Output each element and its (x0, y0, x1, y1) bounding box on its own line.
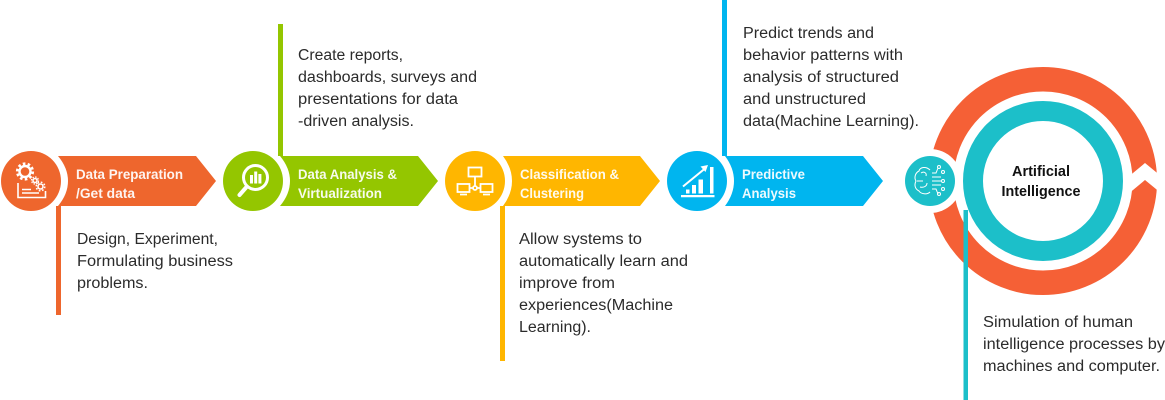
text: classification description: Learning). (519, 319, 591, 336)
step 2: data analysis (223, 24, 477, 211)
accent line: step 1 (56, 206, 61, 315)
arrow: classification (503, 156, 660, 206)
text: data preparation description: problems. (77, 275, 148, 292)
accent line: AI (964, 210, 968, 400)
accent line: step 2 (278, 24, 283, 156)
text: data analysis description: presentations for data (298, 91, 458, 108)
text: predictive analysis description: analysis of structured (743, 69, 899, 86)
text: classification description: experiences(Machine (519, 297, 673, 314)
icon: magnifier with chart (223, 151, 283, 211)
outer orange ring (941, 79, 1145, 283)
icon: circuit brain (905, 156, 955, 206)
heading: predictive analysis: Analysis (742, 185, 796, 201)
heading: artificial intelligence: Intelligence (1002, 184, 1080, 200)
text: predictive analysis description: Predict trends and (743, 25, 874, 42)
step 4: predictive analysis (667, 0, 919, 211)
text: data analysis description: -driven analysis. (298, 113, 414, 130)
text: predictive analysis description: behavior patterns with (743, 47, 903, 64)
white halo around icon (898, 149, 962, 213)
heading: artificial intelligence: Artificial (1012, 164, 1070, 180)
heading: classification: Classification & (520, 166, 619, 182)
ring notch chevron (1130, 163, 1159, 192)
arrow: data preparation (58, 156, 216, 206)
accent line: step 3 (500, 206, 505, 361)
inner teal ring (973, 111, 1113, 251)
icon: network of monitors (445, 151, 505, 211)
step 1: data preparation (1, 151, 233, 315)
text: artificial intelligence description: machines and computer. (983, 358, 1160, 375)
text: classification description: automatically learn and (519, 253, 688, 270)
text: artificial intelligence description: intelligence processes by (983, 336, 1165, 353)
heading: predictive analysis: Predictive (742, 166, 805, 182)
text: data analysis description: dashboards, surveys and (298, 69, 477, 86)
heading: classification: Clustering (520, 185, 584, 201)
icon: gears on tray (1, 151, 61, 211)
icon: rising bar chart (667, 151, 727, 211)
heading: data preparation: Data Preparation (76, 166, 183, 182)
text: data analysis description: Create reports, (298, 47, 403, 64)
step 3: classification (445, 151, 688, 361)
heading: data analysis: Virtualization (298, 185, 382, 201)
text: predictive analysis description: and unstructured (743, 91, 866, 108)
heading: data analysis: Data Analysis & (298, 166, 397, 182)
artificial intelligence rings (898, 79, 1165, 400)
text: artificial intelligence description: Simulation of human (983, 314, 1133, 331)
accent line: step 4 (722, 0, 727, 156)
arrow: data analysis (280, 156, 438, 206)
text: predictive analysis description: data(Machine Learning). (743, 113, 919, 130)
text: data preparation description: Formulating business (77, 253, 233, 270)
text: classification description: improve from (519, 275, 615, 292)
text: classification description: Allow systems to (519, 231, 642, 248)
arrow: predictive analysis (725, 156, 883, 206)
heading: data preparation: /Get data (76, 185, 135, 201)
text: data preparation description: Design, Experiment, (77, 231, 218, 248)
